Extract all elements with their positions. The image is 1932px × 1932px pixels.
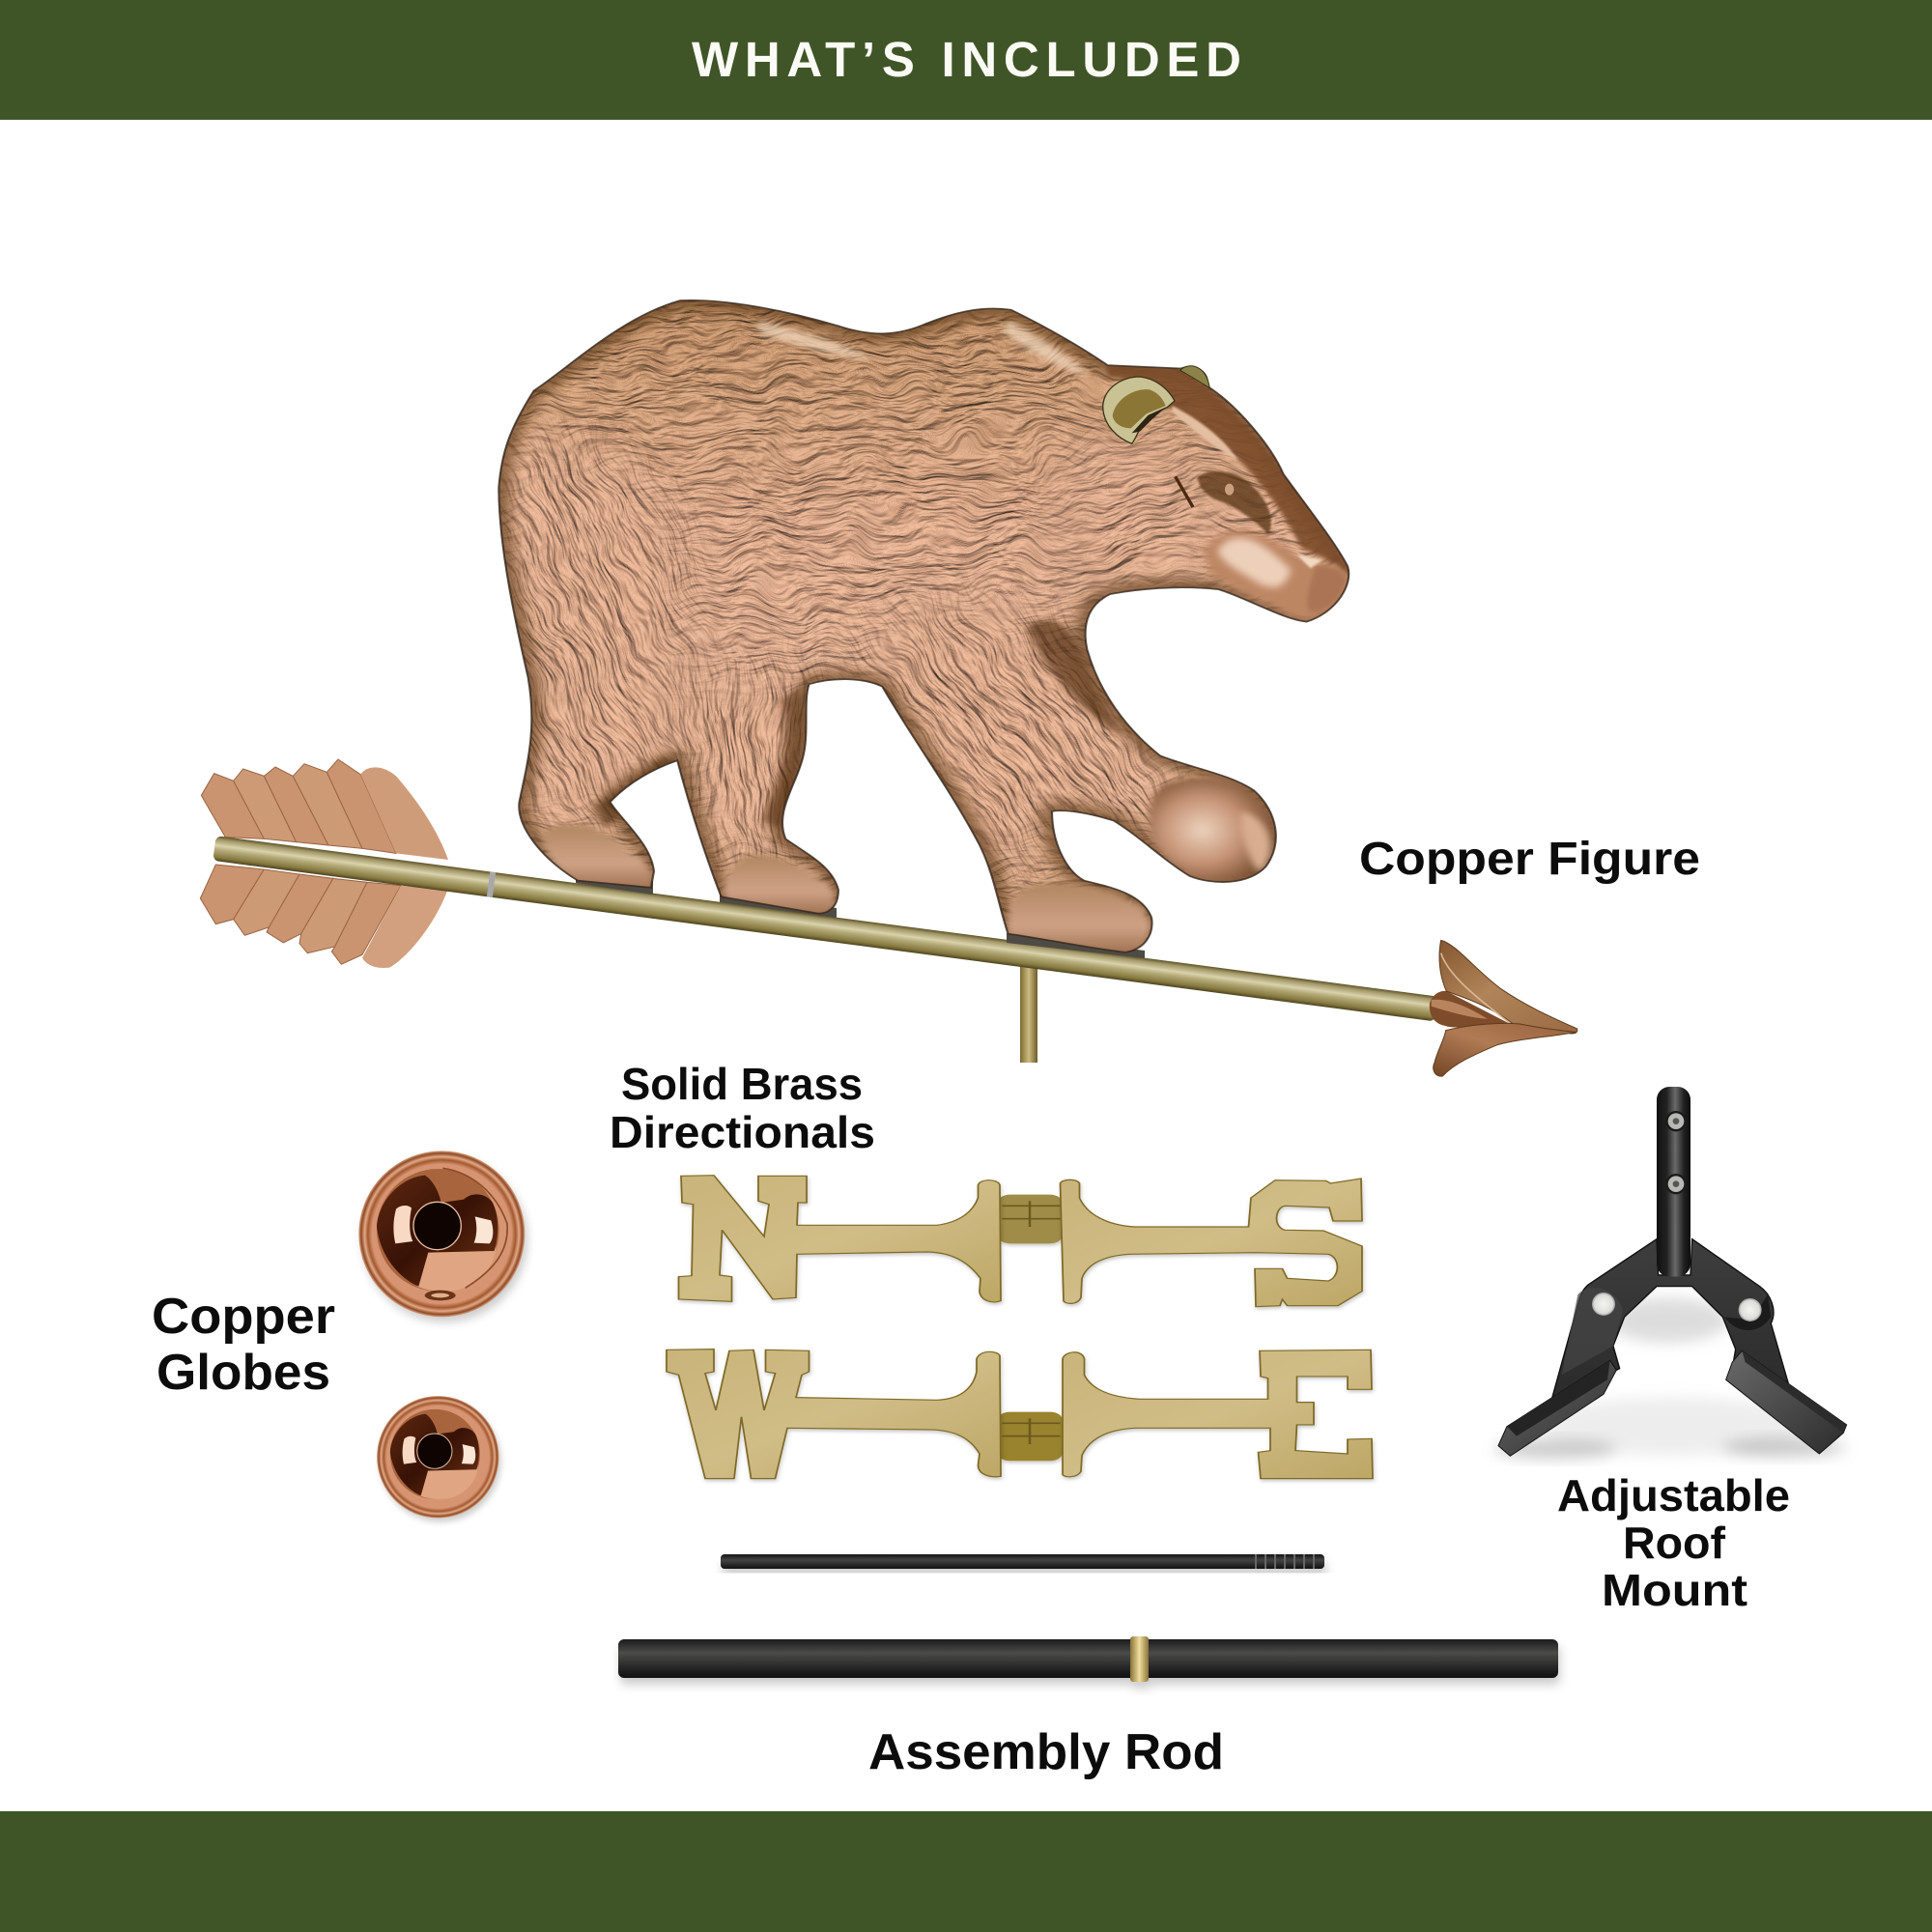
W arm [667, 1350, 1001, 1479]
fur: hind legs [648, 652, 847, 883]
label: Solid Brass Directionals: Solid Brass [621, 1059, 863, 1109]
bear dark shoulder crease [1026, 620, 1125, 737]
N-S hub [997, 1195, 1063, 1243]
bear head detail [1108, 360, 1352, 620]
bear ear [1103, 366, 1209, 443]
icon: copper arrowhead [1430, 940, 1577, 1076]
eye area [1176, 471, 1271, 534]
W-E hub [997, 1412, 1063, 1461]
bolts [1592, 1293, 1762, 1321]
label: Solid Brass Directionals [610, 1059, 875, 1157]
forehead shade [1108, 360, 1352, 577]
icon: copper globe large [358, 1151, 527, 1322]
muzzle [1205, 531, 1352, 620]
icon: copper globe small [377, 1396, 500, 1521]
fur: front leg [837, 574, 1192, 891]
arrow weathervane shaft and fletching [200, 759, 1577, 1076]
icon: adjustable roof mount [1494, 1087, 1847, 1459]
label: Copper Globes: Copper [152, 1289, 335, 1345]
bear body [498, 300, 1349, 952]
icon: arrow fletching [200, 759, 448, 968]
bear top highlight [756, 322, 1090, 377]
N arm [678, 1176, 1001, 1302]
icon: brass shaft [213, 836, 1438, 1021]
mount tube [1657, 1087, 1690, 1277]
label: Solid Brass Directionals: Directionals [610, 1107, 875, 1157]
fur: hind flank [500, 412, 728, 838]
bear interior [498, 300, 1349, 952]
footer bar [0, 1811, 1932, 1932]
label: Adjustable Roof Mount: Roof [1623, 1518, 1726, 1568]
label: Copper Globes: Globes [156, 1345, 330, 1401]
right foot [1726, 1350, 1847, 1454]
E arm [1063, 1350, 1373, 1479]
foot brackets [576, 870, 1145, 958]
forehead highlight [1172, 406, 1238, 461]
title: WHAT’S INCLUDED [692, 32, 1241, 87]
muzzle highlight [1217, 538, 1292, 587]
screws [1665, 1111, 1687, 1194]
icon: thin threaded rod [721, 1554, 1324, 1569]
hind leg dark creases [592, 687, 804, 830]
inner edge shading [498, 300, 1349, 952]
icon: thick assembly rod [618, 1636, 1558, 1682]
label: Assembly Rod: Assembly Rod [868, 1724, 1224, 1780]
bracket [1550, 1239, 1789, 1404]
label: Adjustable Roof Mount: Adjustable [1557, 1470, 1790, 1520]
label: Copper Figure: Copper Figure [1359, 834, 1700, 885]
icon: brass directionals [667, 1176, 1373, 1479]
bear outline [498, 300, 1349, 952]
icon: vertical brass stud [1020, 956, 1037, 1063]
left foot [1498, 1360, 1616, 1456]
fur: neck [1024, 412, 1242, 616]
label: Copper Globes [152, 1289, 335, 1401]
label: Adjustable Roof Mount [1557, 1470, 1790, 1615]
bear paws [543, 778, 1276, 954]
icon: copper bear figure [497, 299, 1350, 958]
S arm [1061, 1179, 1362, 1307]
label: Adjustable Roof Mount: Mount [1602, 1565, 1747, 1615]
nose [1307, 566, 1346, 611]
header bar [0, 0, 1932, 120]
